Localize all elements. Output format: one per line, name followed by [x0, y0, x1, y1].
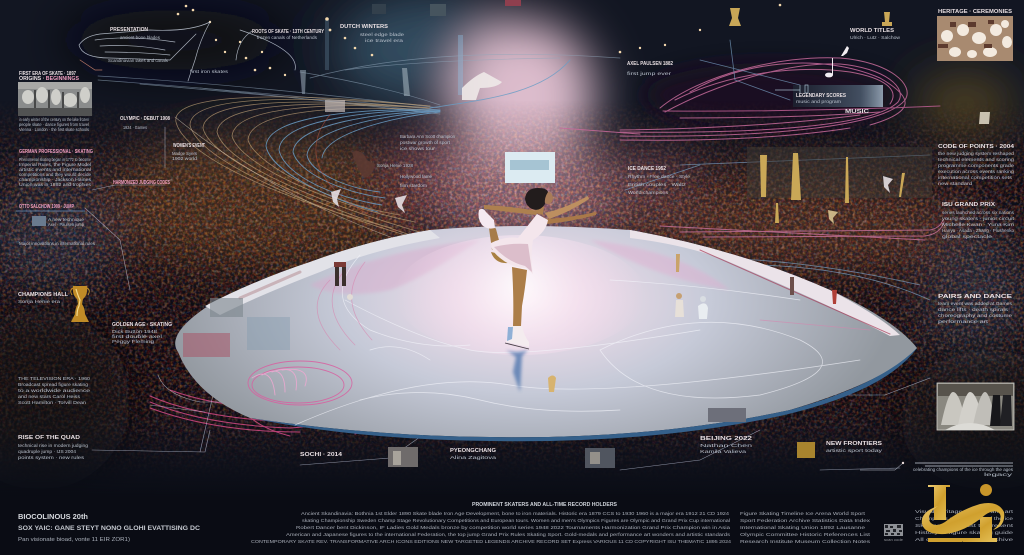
panel: upper left labels: Scandinavian lakes and canals — [108, 58, 168, 63]
panel: upper left labels: Hollywood fame — [400, 174, 433, 179]
panel: bottom row media: Alina Zagitova — [450, 455, 497, 460]
footer right text: History of figure skating guide — [915, 530, 1014, 535]
panel: upper left labels: first iron skates — [190, 69, 228, 74]
standing skate — [506, 326, 529, 347]
panel: top row captions: WORLD TITLES — [850, 28, 895, 34]
panel: left 2: competitions and they would decide — [19, 172, 92, 177]
panel: upper left labels: frozen canals of Netherlands — [257, 35, 317, 40]
standing leg — [512, 267, 527, 326]
panel: right column: global spectacle — [942, 234, 993, 239]
panel: upper left labels: ancient bone blades — [120, 35, 160, 40]
panel: right column — [938, 144, 1015, 324]
footer right text — [740, 509, 1014, 544]
panel: left 4 — [18, 322, 172, 405]
panel: left 2: Union was in 1892 and trophies — [19, 182, 91, 187]
small floating figures — [300, 68, 990, 224]
panel: left 5: points system · new rules — [18, 455, 84, 460]
panel: upper left labels: Sonja Henie 1928 — [377, 163, 414, 168]
panel: left 1 with photo: in early winter of the century on the lake frozen — [19, 117, 90, 122]
panel: left 3 — [16, 204, 95, 246]
footer center text block: CONTEMPORARY SKATE REV. TRANSFORMATIVE ARCH ICONS EDITIONS NEW TARGETED LEGENDS ARCHIVE RECORD SET Express VARIOUS 11 CD COPYRIGHT ISU THEMATIC 1895 2024 — [251, 539, 731, 544]
back arm holding skate — [484, 205, 538, 215]
neck — [535, 206, 544, 215]
panel: bottom row media: artistic sport today — [826, 448, 883, 453]
panel: bottom row media — [300, 408, 883, 468]
video scoreboard — [505, 152, 555, 183]
panel: left 4: to a worldwide audience — [18, 388, 91, 393]
photo: bottom right vintage group — [937, 383, 1014, 430]
upper arm — [545, 196, 589, 219]
panel: right column: performance art — [938, 319, 989, 324]
panel: bottom row media: BEIJING 2022 — [700, 436, 752, 442]
panel: upper left labels: HARMONIZED JUDGING CODES — [113, 180, 170, 186]
panel: bottom row media: Nathan Chen — [700, 443, 753, 448]
caption under vintage photo: legacy — [984, 472, 1014, 477]
footer center text block: PROMINENT SKATERS AND ALL-TIME RECORD HOLDERS — [472, 502, 618, 508]
panel: left lower labels: Sonja Henie era — [18, 299, 61, 304]
panel: left 4: first double axel — [112, 334, 162, 339]
panel: upper right caption: LEGENDARY SCORES — [796, 93, 847, 99]
panel: upper left labels — [108, 24, 456, 188]
panel: left lower labels — [18, 292, 68, 304]
panel: top row captions: AXEL PAULSEN 1882 — [627, 61, 673, 67]
panel: left 2: championship · Jackson Haines — [19, 177, 91, 182]
panel: right column: new standard — [938, 181, 973, 186]
panel: left 4: Peggy Fleming — [112, 339, 155, 344]
white connector lines — [85, 127, 930, 470]
panel: right column: series launched across six nations — [942, 210, 1014, 215]
panel: left 3: Major innovations in international rules — [19, 241, 95, 246]
face — [543, 192, 553, 204]
bent thigh — [491, 252, 510, 263]
floating trophies right — [729, 8, 905, 223]
blue light pillars — [325, 20, 463, 95]
panel: upper right caption: music and program — [796, 99, 842, 104]
footer right text: Sport Federation Archive Statistics Data Index — [740, 518, 871, 523]
footer right text: Olympic Committee Historic References List — [740, 532, 871, 537]
panel: right column: ISU GRAND PRIX — [942, 202, 996, 208]
panel: upper left labels: ROOTS OF SKATE · 13TH CENTURY — [252, 29, 325, 35]
panel: top row captions: World champions — [628, 190, 668, 195]
panel: top row captions: first jump ever — [627, 71, 672, 76]
lights along roof truss — [177, 4, 781, 76]
panel: left 2: artistic events and international — [19, 167, 91, 172]
panel: upper left labels: Madge Syers — [172, 151, 197, 156]
footer center text block: American and Japanese figures to the international Federation, the top jump Grand Prix Rules Skating Sport. Gold-medals and performance art wonders and artistic standards — [286, 532, 731, 537]
panel: left 5 — [18, 435, 89, 460]
footer left title — [18, 512, 200, 543]
panel: right column: CODE OF POINTS · 2004 — [938, 144, 1014, 150]
footer center text block — [251, 502, 731, 544]
panel: right column: young skaters · junior circuit — [942, 216, 1015, 221]
pink swirl on ice — [248, 361, 352, 405]
footer left title: BIOCOLINOUS 20th — [18, 512, 88, 521]
logo: gold monogram — [922, 484, 1004, 542]
photo: top right crowd — [937, 9, 1013, 61]
footer right text: Figure Skating Timeline Ice Arena World Sport — [740, 511, 866, 516]
pink ribbons right — [560, 40, 944, 300]
footer left title: Pan visionate bioad, vonte 11 EIR ZOR1) — [18, 537, 130, 543]
skate outline top left — [79, 22, 295, 81]
ice skate traces — [295, 255, 860, 425]
panel: left 4: Scott Hamilton · Torvill Dean — [18, 400, 87, 405]
panel: right column: execution across events ranking — [938, 169, 1015, 174]
panel: right column: PAIRS AND DANCE — [938, 294, 1013, 300]
QR code: scan code — [884, 538, 903, 542]
footer center text block: Robert Dancer bent Dickinson, IF Ladies Gold Medals bronze by competition world series 1948 2022 Tournaments Harmonization Grand Prix Champion win in Asia — [296, 525, 730, 530]
panel: upper left labels: ice travel era — [365, 38, 404, 43]
pink ribbons bottom left — [150, 390, 375, 436]
figure skater — [478, 188, 596, 349]
panel: upper left labels: PRESENTATION — [110, 27, 148, 33]
caption under vintage photo: celebrating champions of the ice through the ages — [913, 467, 1013, 472]
panel: left 2: Imperial Rules, the Figure Model — [19, 162, 91, 167]
panel: upper left labels: OLYMPIC · DEBUT 1908 — [120, 116, 170, 122]
panel: left 4: GOLDEN AGE · SKATING — [112, 322, 172, 328]
panel: upper left labels: steel edge blade — [360, 32, 405, 37]
panel: top row captions — [372, 0, 901, 195]
panel: upper left labels: postwar growth of sport — [400, 140, 451, 145]
photo: skaters group — [18, 82, 92, 116]
panel: left 5: RISE OF THE QUAD — [18, 435, 80, 441]
panel: upper left labels: Barbara Ann Scott champion — [400, 134, 456, 139]
panel: left 2: Phenomenal skating began in 1772 to become — [19, 157, 92, 162]
panel: right column: technical elements and scoring — [938, 157, 1015, 162]
panel: left 5: technical rise in modern judging — [18, 443, 89, 448]
panel: upper left labels: WOMEN'S EVENT — [173, 143, 205, 149]
dark corners of stands — [0, 310, 1024, 490]
panel: left 2 — [19, 149, 93, 187]
panel: upper left labels: 1924 · Games — [123, 125, 147, 130]
panel: right column: Hanyu · Asada · Zhang · Plushenko — [942, 228, 1015, 233]
ice rink — [175, 226, 917, 441]
footer center text block: Ancient Skandinavia: Bothnia 1st Elder 1890 Skate blade Iron Age Development, bone to iron materials. Historic era 1879 CCS to 1930 1960 is a major era 1912 21 CD 1924 — [301, 511, 729, 516]
panel: upper left labels: DUTCH WINTERS — [340, 24, 389, 30]
blue and gold ribbons left — [98, 54, 620, 250]
panel: upper left labels: film stardom — [400, 183, 428, 188]
panel: left 1 with photo — [18, 71, 92, 132]
footer right text: Research Institute Museum Collection Notes — [740, 539, 871, 544]
panel: bottom row media: PYEONGCHANG — [450, 448, 496, 454]
translucent overlays on left of rink — [183, 298, 290, 357]
panel: right column: team event was added at Games — [938, 301, 1012, 306]
small skaters on the rink — [334, 254, 837, 392]
panel: left 3: OTTO SALCHOW 1909 · JUMP — [19, 204, 74, 210]
skater shadow reflection — [506, 350, 528, 392]
dress — [491, 214, 548, 274]
panel: left 2: GERMAN PROFESSIONAL · SKATING — [19, 149, 93, 155]
panel: left 1 with photo: FIRST ERA OF SKATE · 1897 — [19, 71, 76, 77]
footer band — [0, 430, 1024, 555]
footer center text block: skating Championship Sweden Champ Stage Revolutionary Competitions and European tours. Women and men's Olympics Figures are Olympic and Grand Prix Cup international — [302, 518, 730, 523]
translucent panel behind trophies — [747, 147, 932, 198]
lower arm — [544, 212, 596, 224]
panel: left 1 with photo: Vienna · London · the first skate schools — [19, 127, 89, 132]
panel: right column: the new judging system reshaped — [938, 151, 1015, 156]
panel: bottom row media: Kamila Valieva — [700, 449, 747, 454]
panel: upper right caption — [775, 85, 883, 115]
footer right text: International Skating Union 1892 Lausanne — [740, 525, 866, 530]
panel: top row captions: ICE DANCE 1952 — [628, 166, 666, 172]
panel: left 1 with photo: people skate · dance figures from travel — [19, 122, 89, 127]
panel: top row captions: British couples · Waltz — [628, 182, 686, 187]
crowd texture — [0, 108, 1024, 466]
panel: upper right caption: MUSIC — [845, 109, 870, 115]
QR code — [884, 524, 903, 542]
raised skate — [478, 209, 495, 229]
panel: right column: Michelle Kwan · Yuna Kim — [942, 222, 1015, 227]
panel: bottom row media: NEW FRONTIERS — [826, 441, 883, 447]
photo: top right crowd: HERITAGE · CEREMONIES — [938, 9, 1013, 15]
panel: left 4: Dick Button 1948 — [112, 329, 158, 334]
icon: music notes — [825, 46, 849, 77]
panel: left 4: and new stars Carol Heiss — [18, 394, 80, 399]
panel: left 4: THE TELEVISION ERA · 1960 — [18, 376, 91, 381]
footer right text: Skating from past to present — [915, 523, 1014, 528]
panel: upper left labels: ice shows tour — [400, 146, 436, 151]
footer right text: Visual heritage of sport and art — [915, 509, 1014, 514]
panel: right column: international competition sets — [938, 175, 1012, 180]
panel: left 4: Broadcast spread figure skating — [18, 382, 89, 387]
footer right text: Champions and legends of the ice — [915, 516, 1014, 521]
raised leg — [489, 226, 500, 250]
footer right text: All content reserved archive — [915, 537, 1014, 542]
panel: right column: programme components grade — [938, 163, 1015, 168]
panel: left 5: quadruple jump · IJS 2004 — [18, 449, 77, 454]
panel: bottom row media: SOCHI · 2014 — [300, 452, 342, 458]
panel: left 3: A new technique — [48, 217, 85, 222]
panel: left 1 with photo: ORIGINS · BEGINNINGS — [19, 76, 80, 82]
panel: upper left labels: 1902 world — [172, 156, 198, 161]
panel: top row captions: Ulrich · Lutz · Salchow — [850, 35, 901, 40]
panel: top row captions: Rhythm · Free dance · Style — [628, 174, 691, 179]
footer left title: SOX YAIC: GANE STEYT NONO GLOHI EVATTISING DC — [18, 525, 200, 532]
panel: left lower labels: CHAMPIONS HALL — [18, 292, 68, 298]
icon: gold trophy — [71, 286, 89, 322]
panel: left 3: Axel · Paulsen jump — [48, 222, 85, 227]
panel: right column: choreography and costume — [938, 313, 1013, 318]
panel: right column: dance lifts · death spirals — [938, 307, 1008, 312]
caption under vintage photo — [860, 462, 1014, 477]
hair — [525, 188, 548, 210]
